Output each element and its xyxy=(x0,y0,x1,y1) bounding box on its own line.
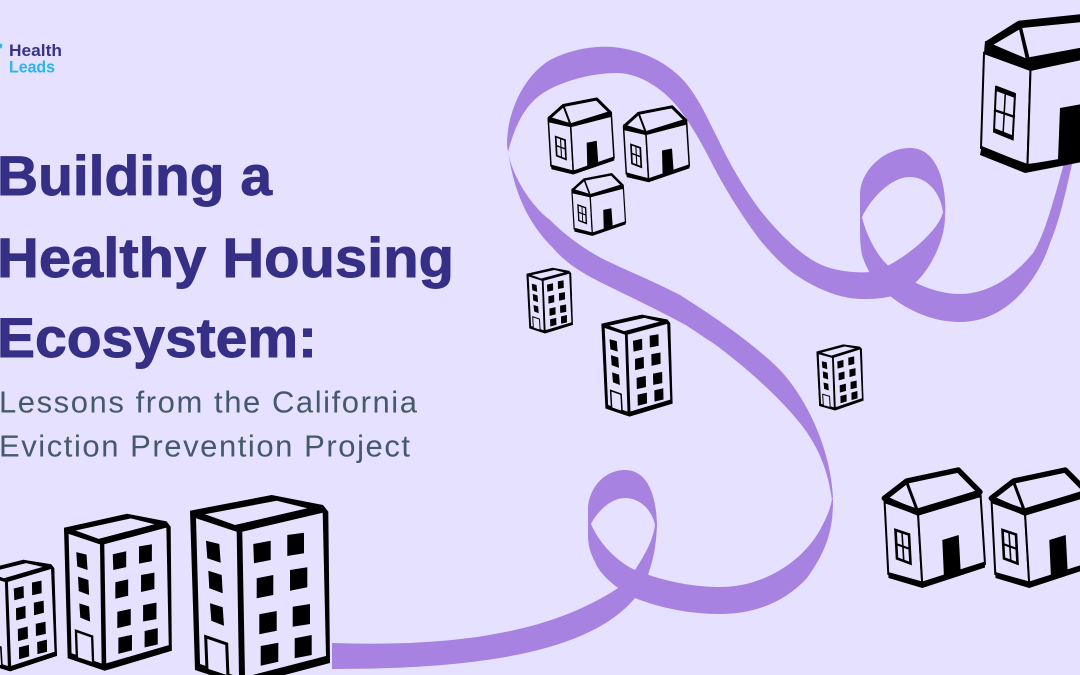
title: Healthy Housing xyxy=(0,226,454,289)
title xyxy=(0,144,454,369)
icon: house cluster bottom xyxy=(572,174,626,236)
icon: medium apartment building centre xyxy=(602,314,673,417)
icon: house cluster left xyxy=(548,99,614,174)
subtitle xyxy=(0,384,418,464)
icon: house bottom right right xyxy=(990,470,1080,588)
icon: small apartment building centre xyxy=(527,268,573,334)
logo: Health Leads xyxy=(0,42,62,77)
icon: medium apartment building bottom left xyxy=(64,513,172,671)
subtitle: Eviction Prevention Project xyxy=(0,428,410,464)
icon: house cluster right xyxy=(623,107,690,182)
icon: house bottom right left xyxy=(884,470,985,588)
logo: Health Leads: Leads xyxy=(9,59,55,77)
title: Ecosystem: xyxy=(0,306,317,369)
icon: large apartment building bottom left xyxy=(190,495,330,675)
icon: large house top right xyxy=(980,14,1080,173)
icon: small apartment building right xyxy=(817,343,863,411)
title: Building a xyxy=(0,144,273,207)
icon: small apartment building bottom left xyxy=(0,559,57,672)
purple ribbon path xyxy=(332,47,1073,669)
logo: Health Leads: Health xyxy=(9,42,62,60)
subtitle: Lessons from the California xyxy=(0,384,418,420)
